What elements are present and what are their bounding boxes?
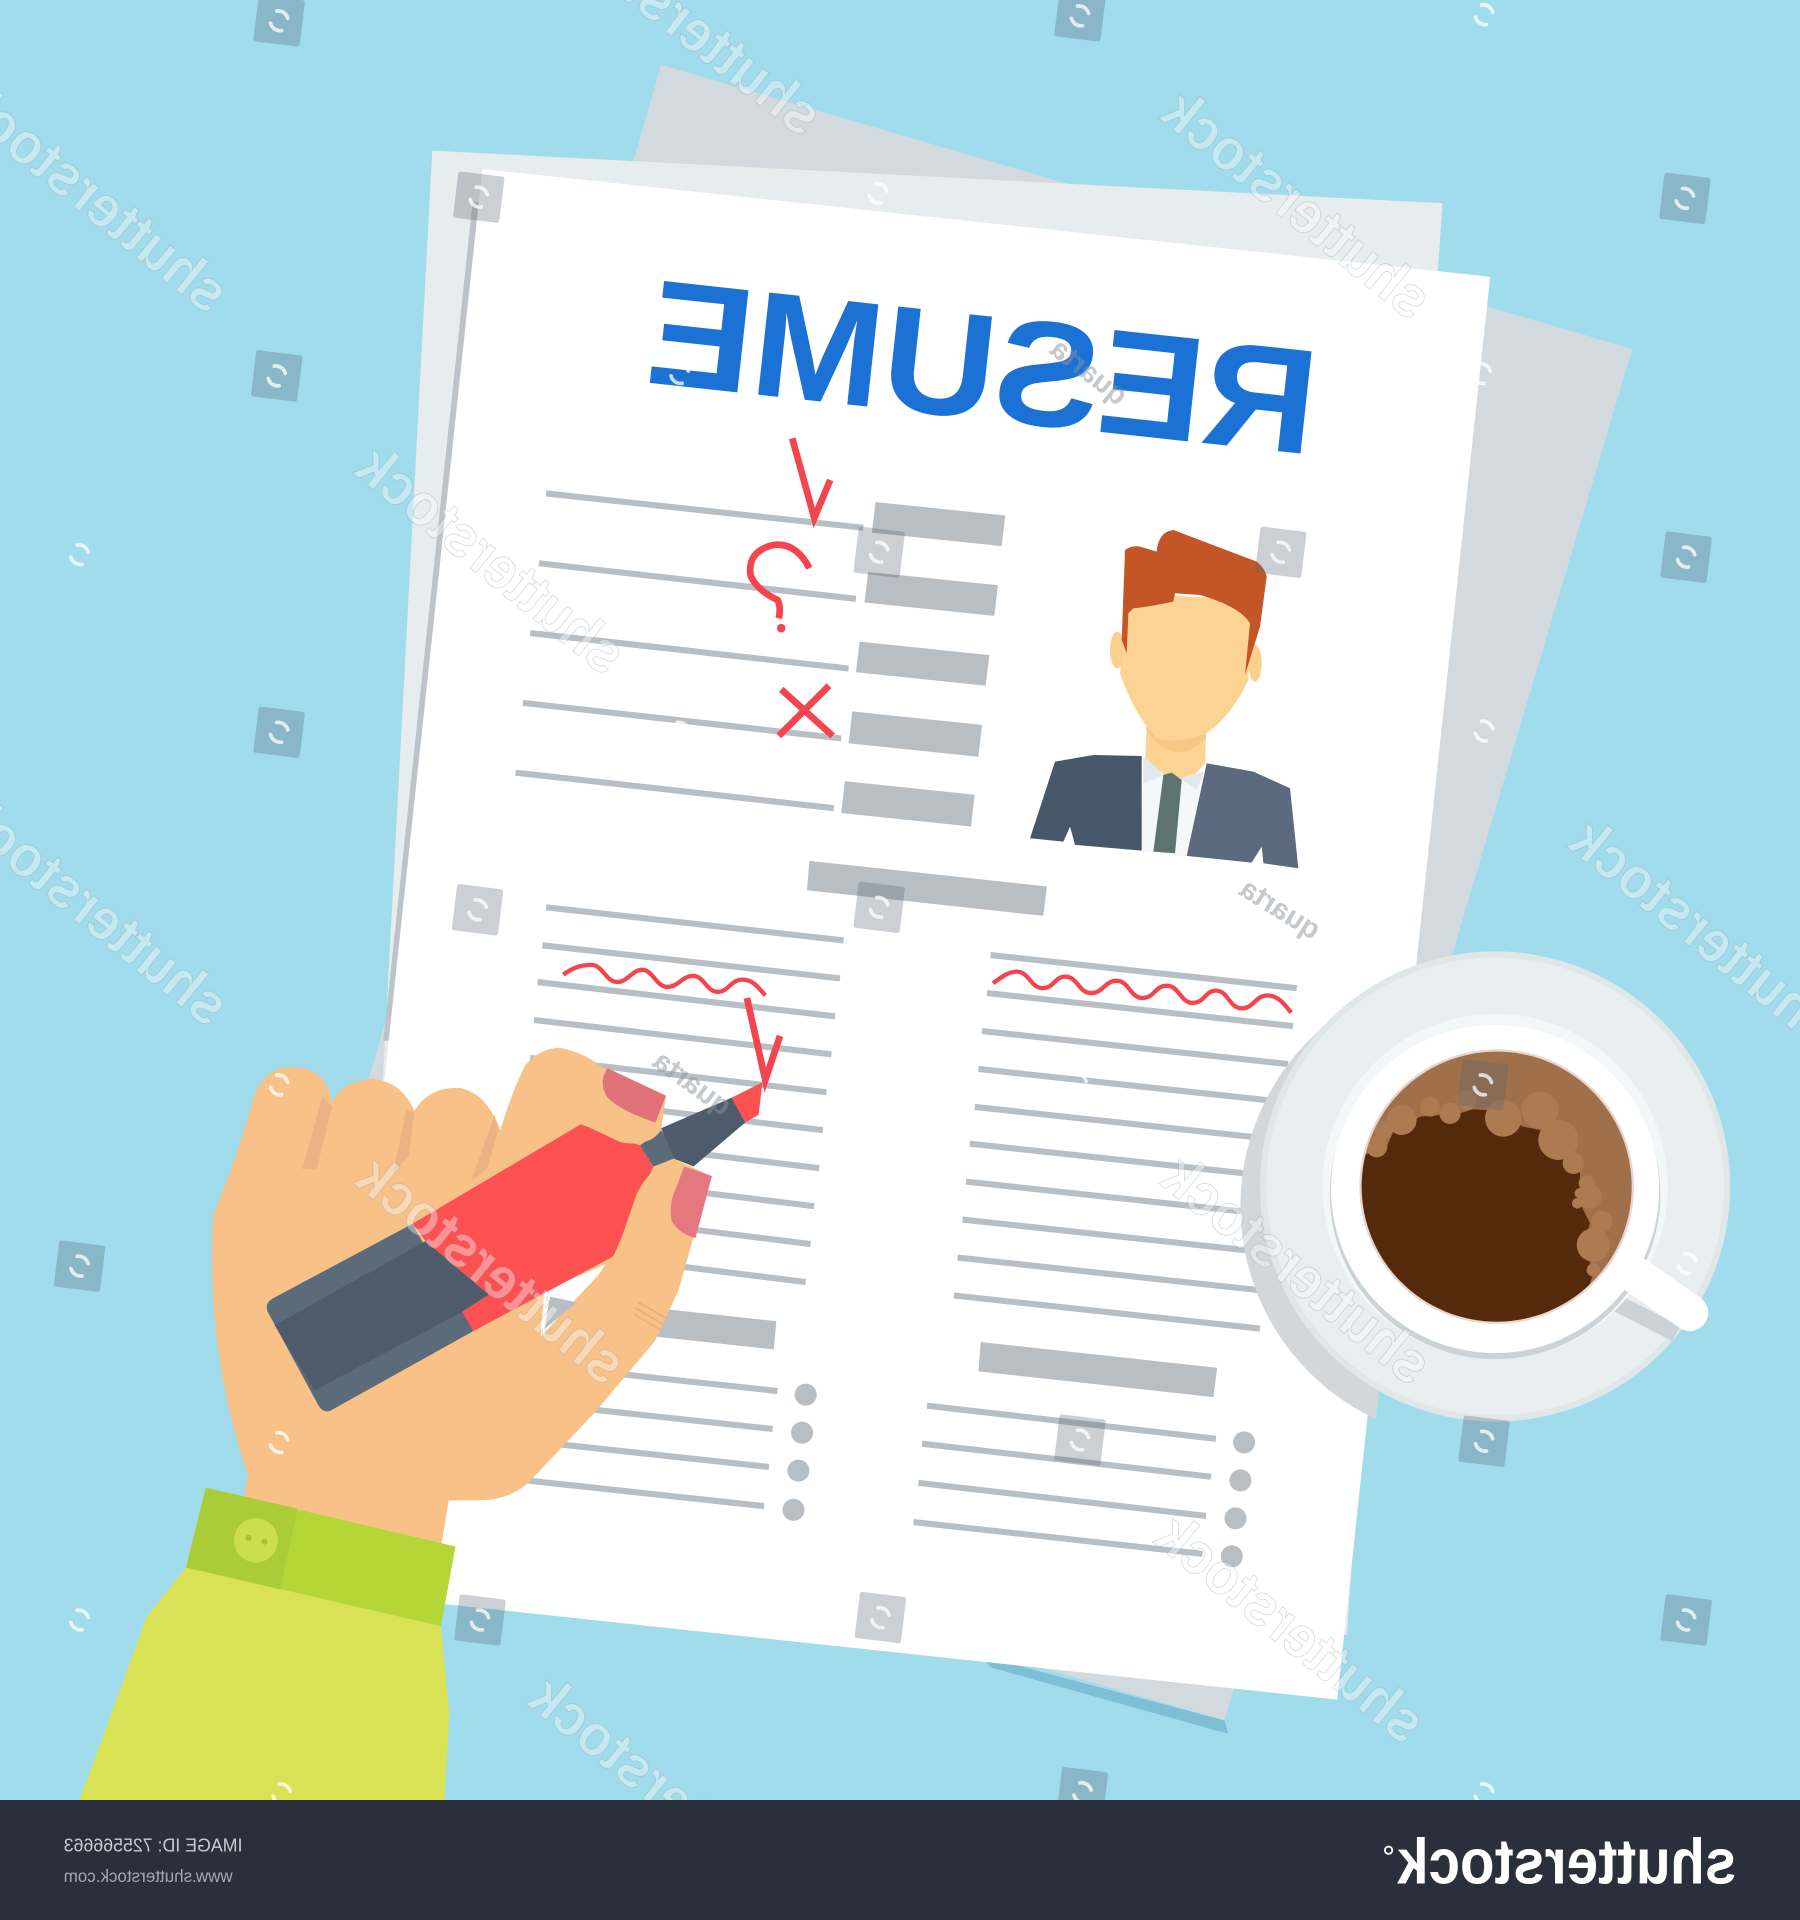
- small mirrored watermark names: quarta: [646, 1044, 738, 1122]
- top finger over marker: [579, 1067, 666, 1144]
- stock watermark text: shutterstock: [344, 1143, 638, 1397]
- hand and marker: [212, 1048, 762, 1559]
- stock watermark text: shutterstock: [517, 1663, 810, 1918]
- lower left skill list: [527, 1365, 817, 1521]
- footer bar: [0, 1800, 1800, 1920]
- section heading bar: middle: [807, 861, 1047, 916]
- back sheet of paper: [263, 65, 1632, 1734]
- red check mark by the pen: [747, 998, 780, 1080]
- heading: mirrored RESUME title: RESUME: [640, 248, 1325, 487]
- finger creases: [303, 1096, 498, 1182]
- lower fingernail: [671, 1166, 712, 1238]
- stock watermark text: shutterstock: [1150, 77, 1443, 332]
- footer: website: www.shutterstock.com: [64, 1866, 234, 1886]
- stock watermark text: shutterstock: [1144, 1501, 1437, 1756]
- small mirrored watermark names: quarta: [1234, 871, 1326, 946]
- left column text lines: [509, 907, 844, 1282]
- middle sheet of paper: [356, 151, 1442, 1635]
- main resume page: [329, 169, 1490, 1700]
- lower right skill list: [913, 1406, 1255, 1567]
- section heading bar: lower left: [536, 1296, 776, 1349]
- top label bars: [841, 502, 1005, 827]
- hand: [212, 1048, 711, 1559]
- shirt sleeve: [80, 1567, 449, 1800]
- coffee cup and saucer: [1240, 951, 1730, 1441]
- red cross mark: [779, 686, 833, 736]
- portrait of candidate: [1030, 530, 1298, 868]
- red check mark near top lines: [792, 438, 830, 518]
- right column text lines: [954, 955, 1297, 1329]
- footer: registered mark: [1385, 1847, 1392, 1854]
- small mirrored watermark names: [646, 331, 1326, 1122]
- stock watermark text: shutterstock: [344, 432, 638, 687]
- knuckle lines: [633, 1302, 667, 1330]
- red wavy underline: right: [993, 972, 1291, 1013]
- gap between marker and palm: [541, 1264, 606, 1337]
- top fingernail: [603, 1068, 666, 1122]
- stock watermark text: shutterstock: [1150, 1143, 1443, 1397]
- red mirrored question mark: [750, 545, 809, 632]
- red wavy underline: left: [563, 965, 765, 996]
- small mirrored watermark names: quarta: [1044, 331, 1134, 412]
- footer: logo wordmark: shutterstock: [1397, 1826, 1736, 1897]
- section heading bar: lower right: [978, 1342, 1217, 1397]
- footer: image id: IMAGE ID: 725566663: [64, 1834, 242, 1855]
- shirt cuff with button: [186, 1488, 456, 1626]
- top text lines: [516, 493, 863, 808]
- lower finger over marker: [606, 1161, 711, 1276]
- marker body: [267, 1082, 762, 1411]
